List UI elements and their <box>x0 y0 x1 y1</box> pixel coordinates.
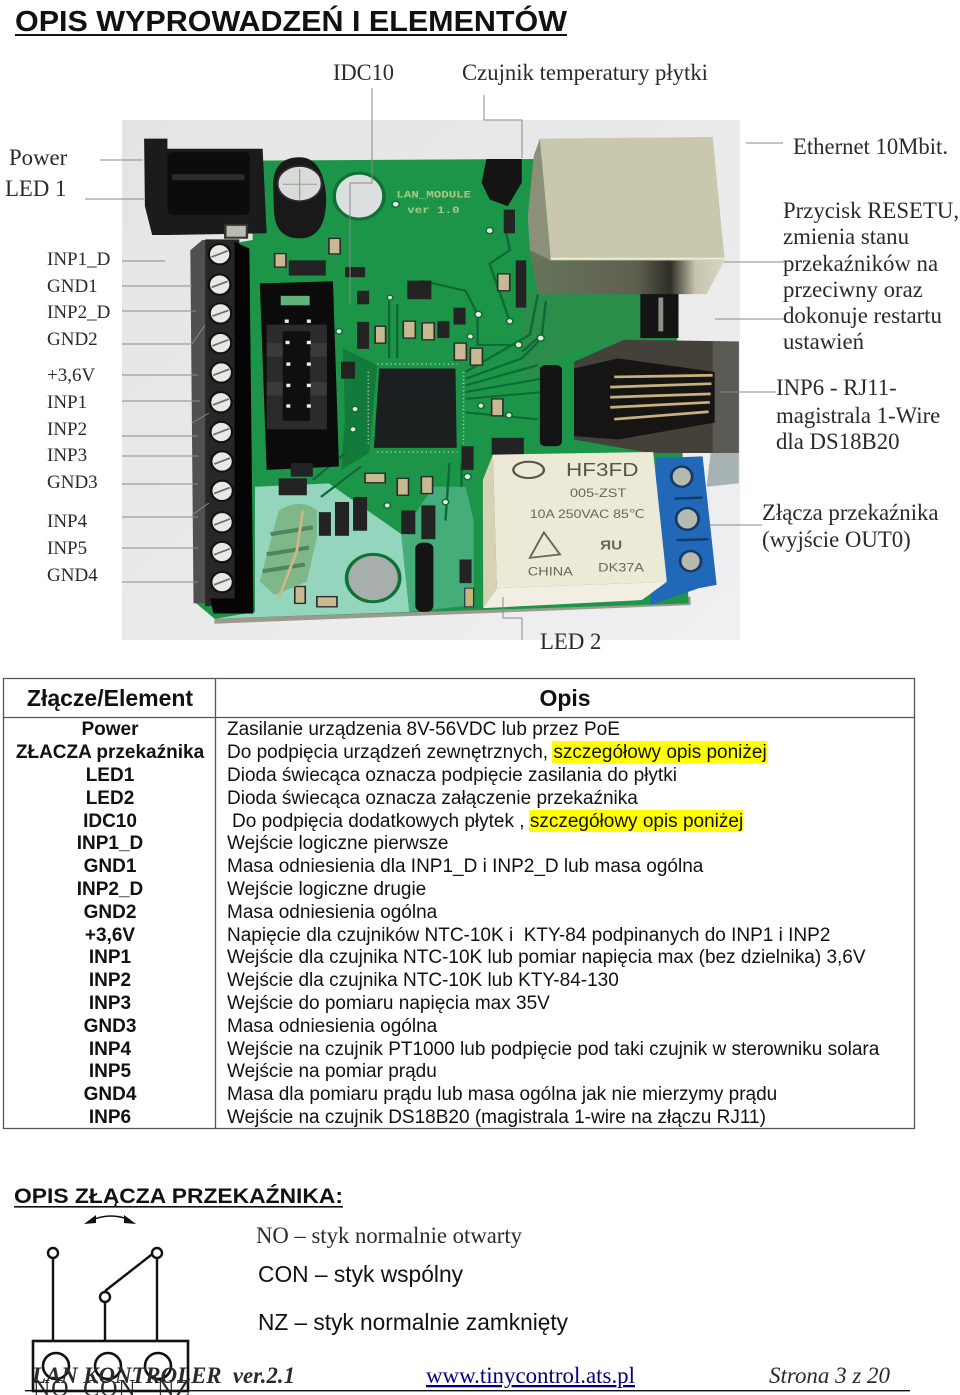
labels: input group 1: INP2_D <box>47 302 110 323</box>
photo: LAN controller board: ver 1.0 <box>407 205 460 217</box>
labels: input group 2: INP3 <box>47 445 87 466</box>
column: descriptions: Wejście dla czujnika NTC-10K lub KTY-84-130 <box>227 970 619 991</box>
column: connector names: INP3 <box>89 993 131 1014</box>
silkscreen: LAN_MODULE <box>396 189 471 201</box>
vias <box>336 201 544 508</box>
column: descriptions: Wejście logiczne pierwsze <box>227 833 448 854</box>
labels: input group 3: GND4 <box>47 565 98 586</box>
RJ11 socket <box>574 340 739 453</box>
mounting holes <box>334 173 384 219</box>
column: descriptions: Wejście do pomiaru napięcia max 35V <box>227 993 550 1014</box>
relay contact diagram <box>33 1215 188 1391</box>
column: descriptions: Wejście na pomiar prądu <box>227 1061 437 1082</box>
electrolytic capacitor <box>273 157 326 238</box>
label: reset button: przeciwny oraz <box>783 277 923 302</box>
photo: LAN controller board: DK37A <box>598 560 644 574</box>
SMD components <box>275 238 510 607</box>
screw terminal <box>190 240 237 603</box>
relay legend: NZ: NZ – styk normalnie zamknięty <box>258 1309 568 1335</box>
column: descriptions: Wejście na czujnik PT1000 lub podpięcie pod taki czujnik w sterowniku solara <box>227 1039 880 1060</box>
column: connector names: INP1_D <box>77 833 143 854</box>
pin description table <box>3 678 915 1128</box>
leader lines <box>85 88 784 640</box>
blue output terminal <box>650 456 717 605</box>
relay legend: CON: CON – styk wspólny <box>258 1261 463 1287</box>
label: reset button: przekaźników na <box>783 251 938 276</box>
labels: input group 1: INP1_D <box>47 249 110 270</box>
labels: input group 2: INP1 <box>47 392 87 413</box>
labels: input group 2: GND3 <box>47 472 98 493</box>
column: connector names: ZŁACZA przekaźnika <box>16 742 205 763</box>
labels: input group 3: INP5 <box>47 538 87 559</box>
column: connector names <box>16 719 205 1128</box>
photo: LAN controller board: CHINA <box>528 564 573 578</box>
labels: input group 3: INP4 <box>47 511 88 532</box>
footer: product name: LAN KONTROLER ver.2.1 <box>31 1363 295 1388</box>
label: Ethernet: Ethernet 10Mbit. <box>793 134 948 159</box>
column: descriptions: Dioda świecąca oznacza podpięcie zasilania do płytki <box>227 765 677 786</box>
temperature sensor <box>482 159 522 206</box>
photo: LAN controller board: 10A 250VAC 85℃ <box>530 507 645 521</box>
terminal block <box>33 1341 188 1391</box>
resistor coil <box>260 504 317 595</box>
column: connector names: INP2 <box>89 970 131 991</box>
label: INP6 RJ11: dla DS18B20 <box>776 429 900 454</box>
contacts and switch <box>48 1248 162 1340</box>
label: LED 2: LED 2 <box>540 629 601 654</box>
column: connector names: GND4 <box>84 1084 137 1105</box>
column: connector names: INP6 <box>89 1107 131 1128</box>
footer <box>25 1363 910 1391</box>
label: reset button: ustawień <box>783 329 865 354</box>
column: connector names: LED2 <box>86 788 134 809</box>
label: Power: Power <box>9 145 68 170</box>
shadow under board <box>214 597 691 624</box>
column: descriptions: Wejście logiczne drugie <box>227 879 426 900</box>
power jack <box>144 139 267 235</box>
label: relay connectors: Złącza przekaźnika <box>762 500 939 525</box>
photo: LAN controller board: HF3FD <box>566 460 638 481</box>
yellow highlights <box>529 741 767 832</box>
column: descriptions: Zasilanie urządzenia 8V-56VDC lub przez PoE <box>227 719 620 740</box>
labels: input group 1: GND1 <box>47 276 98 297</box>
column: descriptions: Masa odniesienia dla INP1_D i INP2_D lub masa ogólna <box>227 856 704 877</box>
footer: website: www.tinycontrol.ats.pl <box>426 1363 635 1388</box>
label: IDC10: IDC10 <box>333 60 394 85</box>
labels: input group 3 <box>47 511 98 586</box>
column: descriptions: Masa odniesienia ogólna <box>227 902 438 923</box>
heading: relay connector description: OPIS ZŁĄCZA PRZEKAŹNIKA: <box>14 1185 343 1208</box>
labels: input group 1 <box>47 249 110 350</box>
LED 1 <box>225 225 247 238</box>
label: INP6 RJ11: INP6 - RJ11- <box>776 375 897 400</box>
column: descriptions: Do podpięcia dodatkowych płytek , szczegółowy opis poniżej <box>232 811 743 832</box>
label: temperature sensor: Czujnik temperatury płytki <box>462 60 708 85</box>
column: connector names: LED1 <box>86 765 135 786</box>
table header: Złącze/Element <box>27 685 193 711</box>
column: connector names: IDC10 <box>83 811 137 832</box>
column: descriptions: Wejście na czujnik DS18B20 (magistrala 1-wire na złączu RJ11) <box>227 1107 766 1128</box>
column: connector names: INP1 <box>89 947 132 968</box>
column: connector names: GND3 <box>84 1016 136 1037</box>
column: connector names: Power <box>81 719 139 740</box>
photo: LAN controller board: ЯU <box>600 537 622 552</box>
label: reset button <box>783 198 959 354</box>
label: reset button: Przycisk RESETU, <box>783 198 959 223</box>
title: OPIS WYPROWADZEŃ I ELEMENTÓW <box>15 4 568 38</box>
icon: contact swing arrow <box>84 1215 136 1224</box>
column: connector names: +3,6V <box>85 925 135 946</box>
microcontroller chip <box>374 368 457 448</box>
column: connector names: INP2_D <box>77 879 143 900</box>
pin headers <box>415 291 679 612</box>
label: relay connectors: (wyjście OUT0) <box>762 527 911 552</box>
table header <box>27 685 591 711</box>
IDC10 connector <box>260 281 339 470</box>
label: relay connectors <box>762 500 939 552</box>
column: descriptions: Masa dla pomiaru prądu lub masa ogólna jak nie mierzymy prądu <box>227 1084 777 1105</box>
column: descriptions: Dioda świecąca oznacza załączenie przekaźnika <box>227 788 638 809</box>
Ethernet socket <box>530 250 725 294</box>
printed circuit board <box>192 159 689 619</box>
column: descriptions: Napięcie dla czujników NTC-10K i KTY-84 podpinanych do INP1 i INP2 <box>227 925 830 946</box>
labels: input group 1: GND2 <box>47 329 98 350</box>
column: connector names: GND2 <box>84 902 136 923</box>
column: descriptions: Masa odniesienia ogólna <box>227 1016 438 1037</box>
column: connector names: GND1 <box>84 856 137 877</box>
relay <box>483 582 667 608</box>
footer: page number: Strona 3 z 20 <box>769 1363 890 1388</box>
column: descriptions <box>227 719 880 1128</box>
column: descriptions: Wejście dla czujnika NTC-10K lub pomiar napięcia max (bez dzielnika) 3,6V <box>227 947 866 968</box>
column: connector names: INP5 <box>89 1061 132 1082</box>
column: descriptions: Do podpięcia urządzeń zewnętrznych, szczegółowy opis poniżej <box>227 742 767 763</box>
LED 2 <box>465 588 474 607</box>
label: INP6 RJ11 <box>776 375 940 454</box>
table header: Opis <box>539 685 591 711</box>
label: reset button: zmienia stanu <box>783 224 910 249</box>
photo: LAN controller board: 005-ZST <box>570 486 626 500</box>
photo: LAN controller board <box>122 120 740 640</box>
labels: input group 2 <box>47 365 98 493</box>
label: LED 1: LED 1 <box>5 176 66 201</box>
label: INP6 RJ11: magistrala 1-Wire <box>776 403 940 428</box>
column: connector names: INP4 <box>89 1039 132 1060</box>
labels: input group 2: INP2 <box>47 419 87 440</box>
traces <box>313 230 546 521</box>
label: reset button: dokonuje restartu <box>783 303 943 328</box>
relay legend: NO: NO – styk normalnie otwarty <box>256 1223 522 1248</box>
labels: input group 2: +3,6V <box>47 365 95 386</box>
